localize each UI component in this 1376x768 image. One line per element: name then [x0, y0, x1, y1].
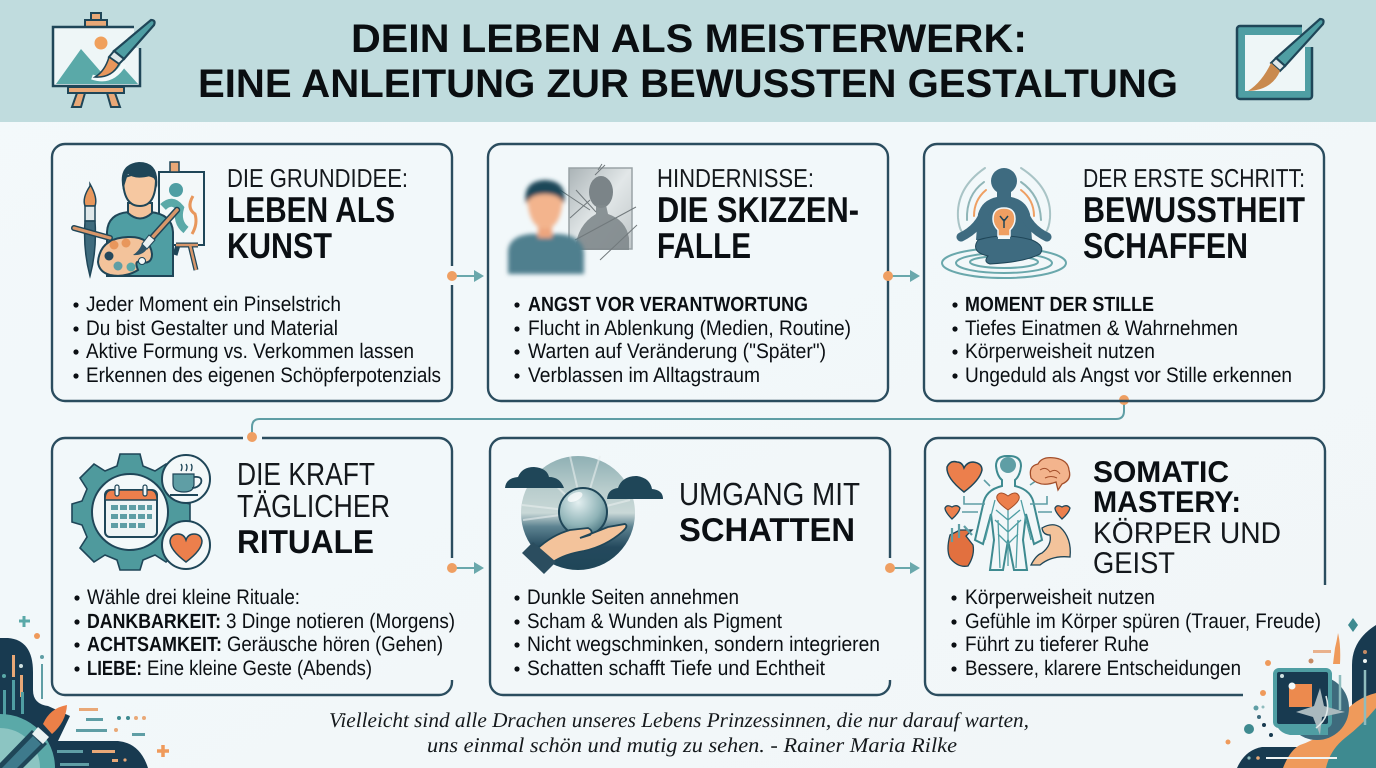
heading: RITUALE: [237, 523, 374, 560]
quote: uns einmal schön und mutig zu sehen. - Rainer Maria Rilke: [427, 733, 957, 757]
bullet list: Scham & Wunden als Pigment: [527, 610, 782, 633]
bullet list: [952, 293, 1292, 387]
bullet list: Führt zu tieferer Ruhe: [965, 633, 1149, 656]
heading: MASTERY:: [1093, 486, 1241, 519]
heading: [1093, 456, 1281, 580]
bullet list: Gefühle im Körper spüren (Trauer, Freude): [965, 610, 1321, 633]
icon: orb in hand: [505, 456, 663, 574]
bullet list: MOMENT DER STILLE: [965, 293, 1154, 316]
bullet list: Flucht in Ablenkung (Medien, Routine): [528, 317, 851, 340]
bullet list: Wähle drei kleine Rituale:: [87, 586, 300, 609]
arrow: card 2 to 3: [883, 270, 920, 282]
heading: [657, 163, 859, 266]
bullet list: Geräusche hören (Gehen): [227, 633, 443, 656]
bullet list: [514, 293, 851, 387]
panel: der erste schritt: [924, 144, 1324, 401]
arrow: card 4 to 5: [447, 562, 484, 574]
heading: SCHAFFEN: [1083, 225, 1248, 266]
bullet list: Aktive Formung vs. Verkommen lassen: [86, 340, 414, 363]
heading: DIE GRUNDIDEE:: [227, 163, 408, 193]
heading: DIE KRAFT: [237, 456, 375, 492]
heading: SOMATIC: [1093, 456, 1229, 489]
bullet list: DANKBARKEIT:: [87, 610, 221, 633]
bullet list: [514, 586, 880, 680]
decoration: bottom left corner: [0, 616, 169, 768]
arrow: card 5 to 6: [885, 562, 920, 574]
bullet list: Körperweisheit nutzen: [965, 586, 1155, 609]
bullet list: [73, 293, 441, 387]
bullet list: Körperweisheit nutzen: [965, 340, 1155, 363]
heading: FALLE: [657, 225, 751, 266]
bullet list: [951, 586, 1321, 680]
bullet list: LIEBE:: [87, 657, 142, 680]
quote: [329, 708, 1029, 757]
connector: row 1 to row 2: [247, 395, 1129, 442]
bullet list: Jeder Moment ein Pinselstrich: [86, 293, 341, 316]
bullet list: Bessere, klarere Entscheidungen: [965, 657, 1241, 680]
decoration: bottom right corner: [1226, 618, 1376, 768]
bullet list: Du bist Gestalter und Material: [86, 317, 338, 340]
icon: body, hearts, brain: [945, 456, 1070, 570]
title: DEIN LEBEN ALS MEISTERWERK:: [351, 17, 1027, 61]
title: EINE ANLEITUNG ZUR BEWUSSTEN GESTALTUNG: [198, 62, 1178, 106]
panel: somatic mastery: [925, 438, 1325, 695]
heading: DIE SKIZZEN-: [657, 189, 859, 230]
heading: HINDERNISSE:: [657, 163, 814, 193]
panel: umgang mit schatten: [490, 438, 890, 695]
heading: KÖRPER UND: [1093, 517, 1281, 550]
bullet list: 3 Dinge notieren (Morgens): [226, 610, 455, 633]
panel: taegliche rituale: [52, 438, 455, 695]
heading: DER ERSTE SCHRITT:: [1083, 163, 1305, 193]
heading: UMGANG MIT: [679, 476, 860, 512]
heading: [679, 476, 860, 548]
heading: BEWUSSTHEIT: [1083, 189, 1305, 230]
bullet list: Ungeduld als Angst vor Stille erkennen: [965, 364, 1292, 387]
heading: KUNST: [227, 225, 332, 266]
bullet list: Schatten schafft Tiefe und Echtheit: [527, 657, 825, 680]
icon: meditating figure: [942, 168, 1066, 278]
heading: SCHATTEN: [679, 511, 855, 548]
bullet list: Tiefes Einatmen & Wahrnehmen: [965, 317, 1238, 340]
panel: hindernisse: [488, 144, 888, 401]
bullet list: ACHTSAMKEIT:: [87, 633, 222, 656]
heading: LEBEN ALS: [227, 189, 395, 230]
heading: GEIST: [1093, 547, 1175, 580]
icon: artist at easel: [74, 162, 204, 276]
icon: sketch figure and person: [508, 164, 637, 274]
icon: gear, calendar, cup, heart: [72, 454, 210, 570]
header band: [0, 0, 1376, 122]
quote: Vielleicht sind alle Drachen unseres Lebens Prinzessinnen, die nur darauf warten,: [329, 708, 1029, 732]
heading: [237, 456, 390, 560]
panel: die grundidee: [52, 144, 456, 401]
heading: [227, 163, 408, 266]
icon: framed canvas with brush: [1237, 19, 1324, 99]
bullet list: Erkennen des eigenen Schöpferpotenzials: [86, 364, 441, 387]
bullet list: [74, 586, 455, 680]
bullet list: Nicht wegschminken, sondern integrieren: [527, 633, 880, 656]
bullet list: Verblassen im Alltagstraum: [528, 364, 760, 387]
bullet list: Warten auf Veränderung ("Später"): [528, 340, 826, 363]
icon: easel with brush: [53, 13, 155, 107]
heading: TÄGLICHER: [237, 488, 390, 524]
bullet list: Dunkle Seiten annehmen: [527, 586, 739, 609]
arrow: card 1 to 2: [447, 270, 484, 282]
heading: [1083, 163, 1305, 266]
bullet list: ANGST VOR VERANTWORTUNG: [528, 293, 808, 316]
bullet list: Eine kleine Geste (Abends): [147, 657, 372, 680]
title: [198, 17, 1178, 106]
